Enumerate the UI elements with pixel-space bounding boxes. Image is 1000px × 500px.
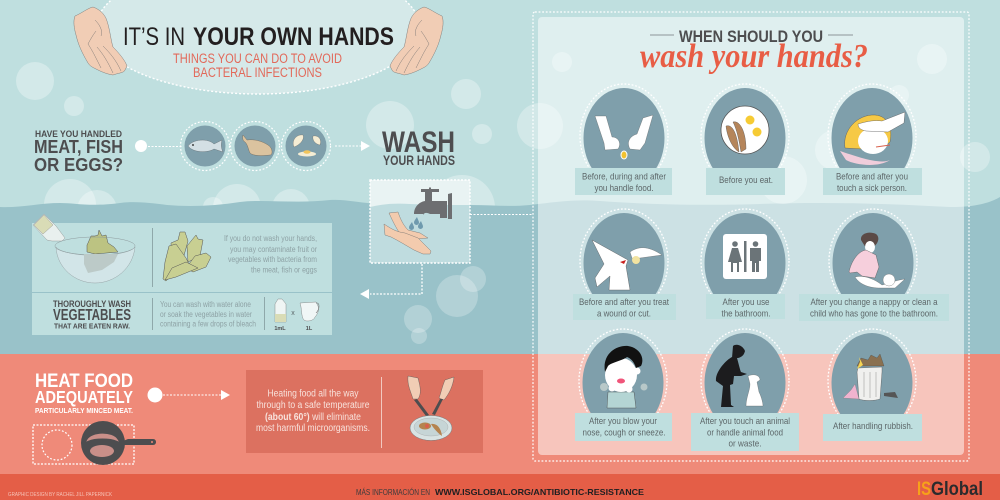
- heading: when should you: WHEN SHOULD YOU: [679, 27, 823, 46]
- heading: wash your hands: [382, 126, 455, 168]
- subtitle: THINGS YOU CAN DO TO AVOID: [173, 51, 342, 66]
- heading: wash your hands: wash your hands?: [640, 38, 868, 75]
- text: heating food: Heating food all the way: [268, 388, 358, 400]
- item: blow your nose: After you blow your: [589, 415, 657, 426]
- heading: heat food adequately: HEAT FOOD: [35, 371, 133, 392]
- item: nappy: child who has gone to the bathroom.: [810, 308, 938, 318]
- text: bleach advice: You can wash with water alone: [160, 300, 251, 309]
- icon: bleach measure: 1mL: [274, 326, 286, 332]
- heading: thoroughly wash vegetables: VEGETABLES: [53, 307, 131, 324]
- icon: water drops: [409, 217, 423, 230]
- icon: plate with sausages and tongs: [408, 376, 454, 440]
- arrow: tap panel to vegetables: [360, 214, 533, 299]
- background: red band: [0, 354, 1000, 475]
- logo: ISGlobal: Global: [931, 479, 983, 500]
- title: IT’S IN: [123, 23, 185, 51]
- question: handled meat, fish or eggs: OR EGGS?: [34, 154, 123, 175]
- text: bleach advice: or soak the vegetables in water: [160, 310, 252, 319]
- background: water band: [0, 197, 1000, 354]
- heading: thoroughly wash vegetables: [53, 299, 131, 330]
- more information link: MÁS INFORMACIÓN EN: [356, 488, 430, 497]
- item: handle food: [575, 84, 672, 195]
- title: [123, 23, 394, 51]
- icon: water jug: 1L: [306, 326, 313, 332]
- icon: fish: [180, 122, 230, 170]
- heading: heat food adequately: [35, 371, 133, 415]
- item: handling rubbish: After handling rubbish.: [833, 420, 913, 431]
- heading: heat food adequately: ADEQUATELY: [35, 387, 133, 407]
- item: handle food: Before, during and after: [582, 170, 666, 182]
- item: blow your nose: nose, cough or sneeze.: [582, 426, 666, 438]
- item: bathroom: the bathroom.: [722, 308, 770, 318]
- arrow: question to food icons: [135, 140, 183, 152]
- item: wound or cut: a wound or cut.: [597, 308, 651, 318]
- item: bathroom: [701, 209, 789, 319]
- logo: ISGlobal: IS: [917, 479, 931, 500]
- credit: GRAPHIC DESIGN BY RACHEL JILL PAPERNICK: [8, 492, 112, 498]
- question: handled meat, fish or eggs: [34, 129, 123, 175]
- icon: bleach bottle pouring: [33, 214, 65, 241]
- heading: thoroughly wash vegetables: THOROUGHLY WASH: [53, 299, 131, 309]
- item: sick person: [823, 84, 922, 195]
- subtitle: BACTERAL INFECTIONS: [193, 65, 322, 80]
- divider: [152, 228, 153, 287]
- item: nappy: After you change a nappy or clean a: [810, 296, 938, 307]
- panel: when should you wash your hands: [517, 12, 990, 461]
- item: before you eat: Before you eat.: [719, 174, 773, 185]
- text: contamination warning: If you do not wash your hands,: [224, 234, 317, 243]
- title: YOUR OWN HANDS: [193, 23, 394, 51]
- item: before you eat: [701, 84, 789, 195]
- footer band: [0, 474, 1000, 500]
- item: touch an animal: After you touch an animal: [700, 415, 790, 426]
- text: heating food: through to a safe temperature: [256, 400, 370, 411]
- panel: vegetables: [32, 214, 332, 335]
- text: contamination warning: the meat, fish or eggs: [251, 266, 317, 274]
- panel: heating explanation: [246, 370, 483, 453]
- heading: heat food adequately: PARTICULARLY MINCED MEAT.: [35, 406, 133, 415]
- text: contamination warning: [224, 234, 317, 274]
- subtitle: [173, 51, 342, 80]
- item: bathroom: After you use: [722, 296, 770, 307]
- title ellipse: [96, 0, 420, 94]
- icon: washing hands: [384, 212, 431, 254]
- divider: [152, 298, 153, 330]
- more information link: WWW.ISGLOBAL.ORG/ANTIBIOTIC-RESISTANCE: [435, 487, 644, 497]
- item: wound or cut: Before and after you treat: [579, 296, 669, 307]
- item: wound or cut: [573, 209, 676, 320]
- icon: bowl with lettuce: [55, 230, 135, 283]
- text: bleach advice: containing a few drops of bleach: [160, 320, 256, 328]
- item: touch an animal: or handle animal food: [707, 426, 783, 438]
- item: handling rubbish: [823, 329, 922, 441]
- heading: wash your hands: WASH: [382, 126, 455, 159]
- icon: eggs: [282, 122, 330, 170]
- icon: lettuce: [163, 232, 211, 281]
- item: nappy: [799, 209, 949, 321]
- text: heating food: [256, 388, 370, 434]
- item: touch an animal: or waste.: [728, 438, 762, 448]
- multiply sign: x: [291, 310, 295, 317]
- item: blow your nose: [575, 329, 672, 441]
- icon: tap: [414, 188, 452, 219]
- icon: hob and frying pan: [33, 421, 156, 465]
- item: sick person: Before and after you: [836, 170, 908, 182]
- panel: tap and hand washing: [369, 179, 471, 264]
- question: handled meat, fish or eggs: MEAT, FISH: [34, 136, 123, 157]
- icon: right hand: [390, 7, 443, 75]
- item: sick person: touch a sick person.: [837, 182, 907, 193]
- question: handled meat, fish or eggs: HAVE YOU HANDLED: [35, 129, 122, 139]
- arrow: heat food to explanation: [148, 388, 230, 402]
- text: contamination warning: you may contaminate fruit or: [230, 245, 317, 254]
- item: touch an animal: [691, 329, 799, 451]
- arrow: food icons to wash: [335, 141, 370, 151]
- text: heating food: most harmful microorganisms.: [256, 423, 370, 434]
- item: handle food: you handle food.: [594, 182, 654, 193]
- divider: [264, 297, 265, 330]
- heading: wash your hands: YOUR HANDS: [383, 153, 455, 168]
- icon: left hand: [74, 7, 127, 75]
- icon: water jug: [300, 302, 319, 332]
- heading: thoroughly wash vegetables: THAT ARE EATEN RAW.: [54, 324, 130, 330]
- icon: chicken: [230, 122, 280, 170]
- text: bleach advice: [160, 300, 256, 328]
- icon: bleach measure: [274, 299, 286, 332]
- text: contamination warning: vegetables with bacteria from: [228, 255, 317, 264]
- more information link: [356, 487, 644, 497]
- text: heating food: (about 60°) will eliminate: [265, 412, 361, 423]
